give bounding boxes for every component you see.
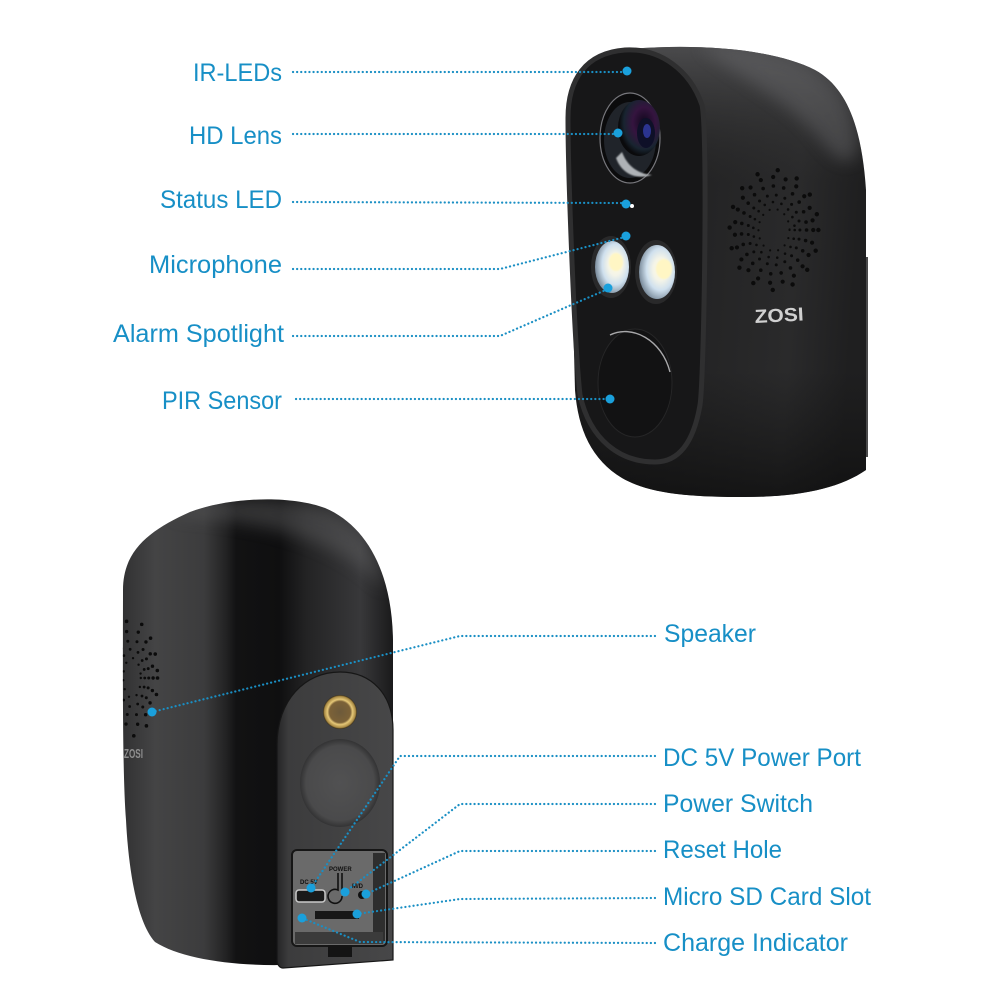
label: IR-LEDs: IR-LEDs: [193, 59, 282, 87]
back logo: ZOSI: [124, 746, 143, 761]
front camera: [568, 45, 868, 497]
back speaker grille: [122, 620, 160, 738]
label: Alarm Spotlight: Alarm Spotlight: [113, 320, 284, 348]
mounting plate: [277, 672, 393, 968]
label: HD Lens: [189, 122, 622, 150]
lens glint: [643, 124, 651, 138]
label: Charge Indicator: [298, 914, 848, 957]
front camera top highlight: [717, 49, 860, 164]
label: Speaker: [148, 620, 756, 716]
spotlight right: [635, 240, 677, 304]
PIR highlight: [610, 332, 670, 372]
speaker grille: [730, 170, 818, 290]
port label DC: DC 5V: [300, 880, 318, 886]
label: Reset Hole: Reset Hole: [663, 836, 782, 864]
back body top highlight: [196, 500, 383, 581]
label: PIR Sensor: PIR Sensor: [162, 387, 282, 415]
label: PIR Sensor: [162, 387, 614, 415]
label: HD Lens: HD Lens: [189, 122, 282, 150]
panel recess: [292, 850, 387, 946]
panel lower: [295, 932, 383, 944]
port label POWER: POWER: [329, 867, 352, 873]
lens barrel: [604, 102, 656, 178]
tripod screw socket: [323, 695, 357, 729]
label: IR-LEDs: [193, 59, 632, 87]
front face plate: [568, 50, 705, 462]
left core: [609, 253, 623, 271]
spotlight left: [591, 236, 631, 298]
PIR lens: [598, 329, 672, 437]
lens pupil: [637, 118, 655, 148]
panel shadow: [373, 853, 385, 943]
left lamp: [595, 241, 629, 293]
lens housing: [600, 93, 660, 183]
reset hole: [358, 891, 366, 899]
label: Alarm Spotlight: [113, 284, 612, 348]
PIR sensor: [598, 329, 672, 437]
side strip: [866, 257, 868, 457]
logo: ZOSI: ZOSI: [754, 304, 804, 328]
left bezel: [591, 236, 631, 298]
latch: [328, 945, 352, 957]
label: DC 5V Power Port: DC 5V Power Port: [663, 744, 861, 772]
right bezel: [635, 240, 677, 304]
label: Status LED: Status LED: [160, 186, 282, 214]
status LED: [630, 204, 634, 208]
label: Status LED: [160, 186, 630, 214]
label: Reset Hole: [362, 836, 782, 898]
label: Power Switch: [340, 790, 813, 896]
back camera: [106, 499, 393, 968]
lens reflection: [616, 152, 652, 177]
label: Micro SD Card Slot: Micro SD Card Slot: [663, 883, 871, 911]
label: Micro SD Card Slot: [352, 883, 871, 918]
label: Speaker: Speaker: [664, 620, 756, 648]
lens glass: [618, 100, 660, 156]
lens: [600, 93, 660, 183]
label: Power Switch: Power Switch: [663, 790, 813, 818]
label: DC 5V Power Port: [306, 744, 861, 892]
right lamp: [639, 245, 675, 299]
power switch: [328, 873, 342, 903]
label: Charge Indicator: Charge Indicator: [663, 929, 848, 957]
front camera shading: [568, 47, 866, 497]
port panel: [292, 850, 387, 957]
DC port: [296, 890, 325, 902]
back camera body: [123, 499, 393, 965]
label: Microphone: Microphone: [149, 251, 282, 279]
micro SD slot: [315, 911, 359, 919]
charge indicator: [299, 915, 305, 921]
mount recess: [300, 739, 380, 827]
label: Microphone: [149, 232, 630, 279]
front camera body: [568, 47, 866, 497]
right core: [656, 259, 672, 279]
port label RESET: M/D: [352, 884, 364, 890]
